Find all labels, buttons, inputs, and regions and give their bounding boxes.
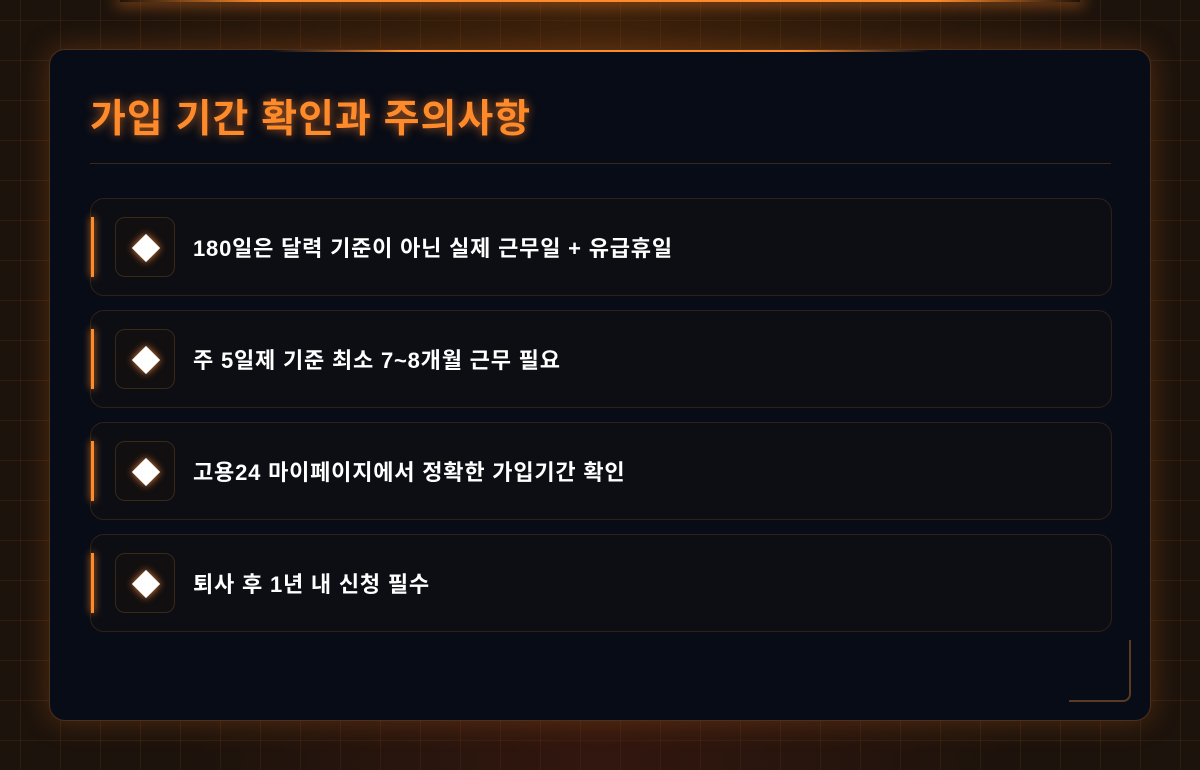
text 3: 고용24 마이페이지에서 정확한 가입기간 확인 <box>193 460 625 485</box>
item 1 <box>90 198 1112 296</box>
text 1: 180일은 달력 기준이 아닌 실제 근무일 + 유급휴일 <box>193 236 673 261</box>
item 2 <box>90 310 1112 408</box>
title: 가입 기간 확인과 주의사항 <box>90 98 531 141</box>
item 3 <box>90 422 1112 520</box>
icon: diamond <box>115 329 175 389</box>
icon: diamond <box>115 441 175 501</box>
icon: diamond <box>115 217 175 277</box>
item 4 <box>90 534 1112 632</box>
icon: diamond <box>115 553 175 613</box>
corner bracket <box>1069 640 1131 702</box>
text 2: 주 5일제 기준 최소 7~8개월 근무 필요 <box>193 348 561 373</box>
text 4: 퇴사 후 1년 내 신청 필수 <box>193 572 430 597</box>
